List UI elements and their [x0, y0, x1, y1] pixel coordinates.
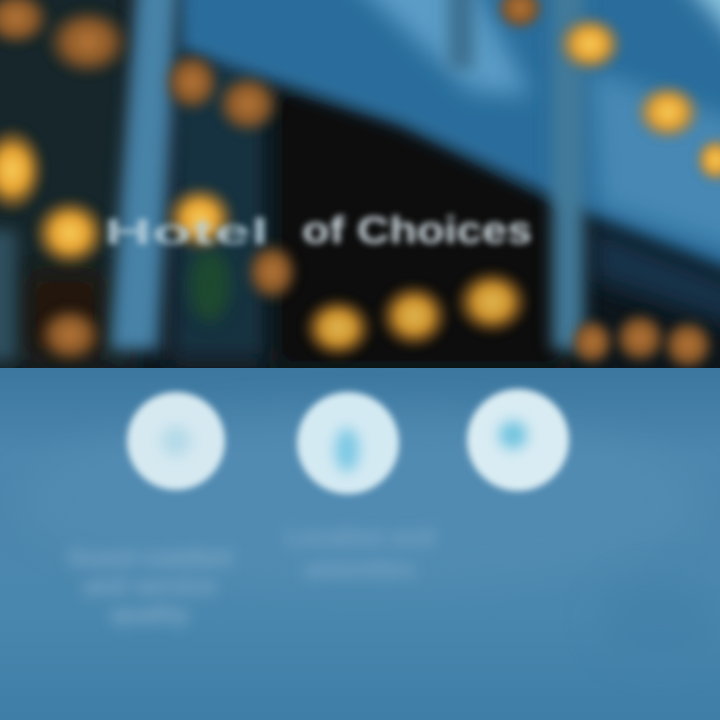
lower blue panel — [0, 368, 720, 720]
headline — [104, 210, 532, 252]
background: dark hotel facade — [0, 0, 720, 400]
headline: of Choices — [302, 210, 532, 252]
left caption: Guest comfort — [68, 545, 232, 572]
headline: Hotel — [104, 211, 269, 252]
icon: right circle — [467, 389, 569, 491]
blue building canopy — [180, 0, 720, 340]
middle caption: Location and — [285, 524, 435, 551]
warm lights — [0, 0, 720, 373]
icon: left circle — [127, 392, 225, 490]
middle caption — [285, 524, 435, 583]
middle caption: amenities — [305, 556, 415, 583]
floor sheen — [20, 410, 720, 660]
left caption: and service — [84, 573, 216, 600]
glass columns — [0, 0, 584, 360]
left caption — [68, 545, 232, 628]
icon: middle circle — [297, 392, 399, 494]
left caption: quality — [111, 601, 189, 628]
